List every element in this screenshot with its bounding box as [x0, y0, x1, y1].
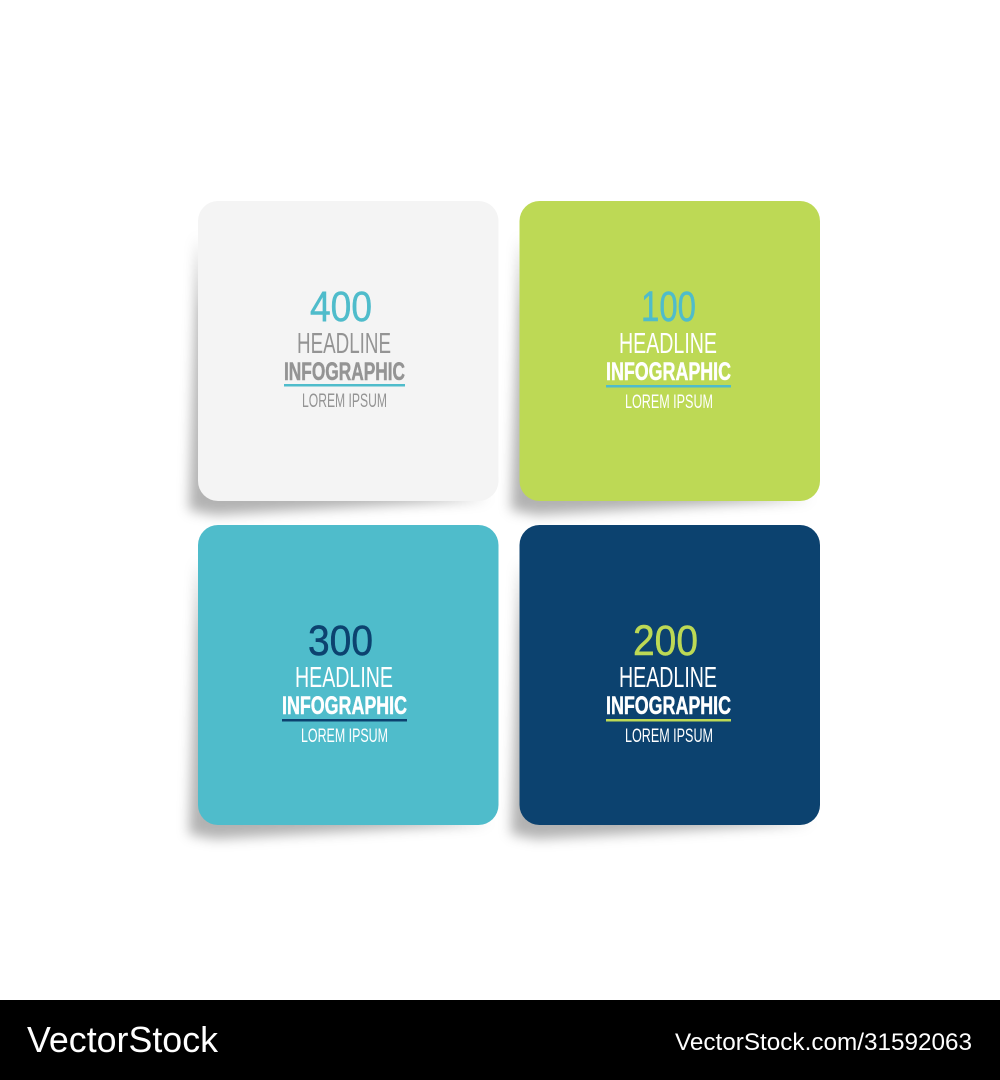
panel: card 300	[189, 525, 498, 839]
card 400 number: 400	[310, 283, 372, 331]
card 300 caption: LOREM IPSUM	[301, 726, 388, 747]
card 100 background	[520, 201, 820, 501]
watermark image id: VectorStock.com/31592063	[675, 1029, 972, 1056]
watermark bar	[0, 1000, 1000, 1080]
watermark logo text: VectorStock	[27, 1019, 219, 1060]
card 400 headline: HEADLINE	[297, 328, 391, 360]
card 200 subtitle: INFOGRAPHIC	[606, 692, 731, 720]
card 400 underline	[284, 384, 405, 386]
panel: card 200	[511, 525, 820, 839]
card 100 headline: HEADLINE	[619, 328, 717, 360]
panel: card 400	[189, 201, 498, 515]
card 100 subtitle: INFOGRAPHIC	[606, 358, 731, 386]
card 200 caption: LOREM IPSUM	[625, 726, 713, 747]
card 400 caption: LOREM IPSUM	[302, 391, 387, 412]
card 100 caption: LOREM IPSUM	[625, 392, 713, 413]
card 400 background	[198, 201, 498, 501]
card 300 background	[198, 525, 498, 825]
card 400 subtitle: INFOGRAPHIC	[284, 358, 405, 386]
card 200 shadow	[511, 559, 812, 839]
panel: card 100	[511, 201, 820, 515]
card 200 background	[520, 525, 820, 825]
card 100 underline	[606, 385, 731, 388]
card 300 number: 300	[308, 617, 373, 665]
card 100 shadow	[511, 235, 812, 515]
card 200 headline: HEADLINE	[619, 662, 717, 694]
card 200 number: 200	[633, 617, 698, 665]
card 300 shadow	[189, 559, 490, 839]
card 300 headline: HEADLINE	[295, 662, 393, 694]
card 300 subtitle: INFOGRAPHIC	[282, 692, 407, 720]
card 100 number: 100	[641, 283, 696, 331]
card 400 shadow	[189, 235, 490, 515]
card 200 underline	[606, 719, 731, 722]
card 300 underline	[282, 719, 407, 722]
